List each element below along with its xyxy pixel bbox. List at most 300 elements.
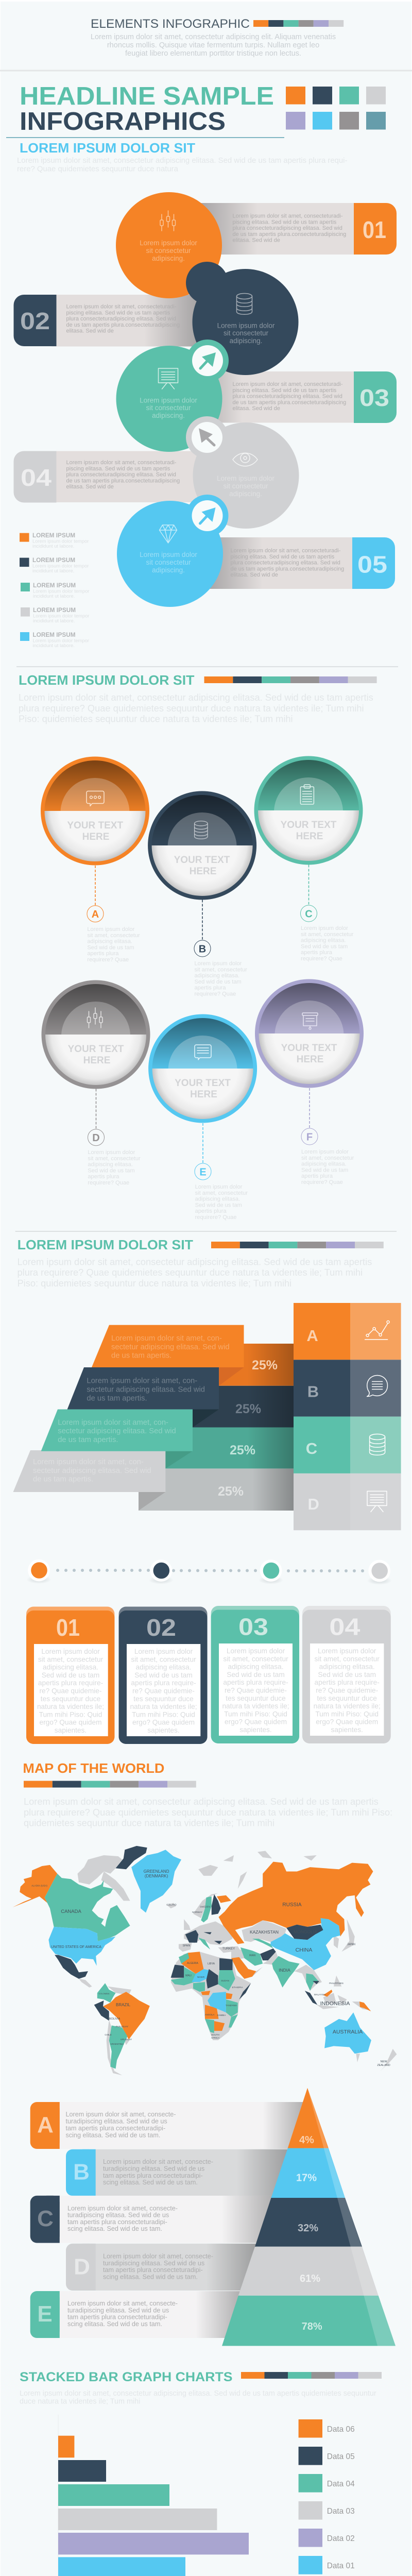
bar D: tam apertis plura consecteturadipi- [103, 2266, 203, 2274]
bar chart legend: Data 04 [327, 2480, 355, 2488]
headline [20, 82, 274, 135]
bubble B navy: HERE [190, 866, 216, 877]
circle: step 03 teal: sit consectetur [146, 404, 191, 412]
bubble D grey: requirere? Quae [88, 1180, 129, 1186]
card 02: re? Quae quidemie- [132, 1687, 195, 1695]
card 02 [119, 1606, 207, 1744]
ribbon: grey: Lorem ipsum dolor sit amet, con- [33, 1458, 144, 1466]
bubble C teal: Lorem ipsum dolor [301, 925, 348, 931]
bar E: Lorem ipsum dolor sit amet, consecte- [67, 2300, 178, 2307]
map: country labels: COLOMBIA [98, 1992, 110, 1995]
blue countries [48, 1850, 371, 2054]
section 3 header: Piso: quidemietes sequuntur duce natura ta videntes ile; Tum mihi [18, 1278, 291, 1289]
map: country labels: BRAZIL [116, 2003, 131, 2007]
panel: step 04 bar: Lorem ipsum dolor sit amet, consecteturadi- [66, 460, 177, 466]
circle: step 04 grey: adipiscing. [229, 490, 262, 498]
card 02: sapientes. [147, 1726, 180, 1734]
panel: step 05 bar: de us tam apertis plura.consecteturadipiscing [231, 566, 344, 572]
circle: step 03 teal: Lorem ipsum dolor [140, 397, 197, 404]
card 04: re? Quae quidemie- [316, 1687, 378, 1694]
card 01: 01 [56, 1614, 80, 1641]
map: country labels: SPAIN [183, 1944, 191, 1947]
card 01: adipiscing elitasa. [43, 1664, 98, 1671]
bubble F purple: sit amet, consectetur [301, 1155, 354, 1161]
map: country labels [31, 1869, 390, 2067]
navy countries [55, 1846, 323, 2021]
map: country labels: JAPAN [347, 1943, 355, 1946]
bubble B navy: apertis plura [195, 985, 226, 991]
bubble E blue: sit amet, consectetur [195, 1190, 248, 1196]
bubble A orange: A [92, 909, 99, 920]
ribbon: navy: Lorem ipsum dolor sit amet, con- [87, 1377, 197, 1385]
map: country labels: ALASKA (USA) [31, 1885, 47, 1887]
bubble F purple: F [306, 1131, 313, 1143]
circle: step 03 teal: adipiscing. [152, 412, 185, 419]
bubble E blue: YOUR TEXT [175, 1078, 231, 1089]
timeline node 3 [260, 1560, 282, 1582]
circle: step 02 navy [186, 262, 299, 375]
pyramid chart: 4% [299, 2134, 314, 2146]
pyramid chart: 78% [302, 2321, 322, 2332]
legend: step colours: incididunt ut labore. [33, 618, 75, 623]
card 03: natura ta videntes ile; [222, 1702, 289, 1710]
bubble B navy: sit amet, consectetur [195, 967, 247, 973]
bar chart legend: Data 06 [327, 2425, 355, 2434]
bar E: tam apertis plura consecteturadipi- [67, 2313, 167, 2320]
card 04: Tum mihi Piso: Quid [315, 1710, 379, 1718]
map: country labels: ANGOLA [205, 2013, 214, 2016]
bar chart legend: Data 03 [327, 2507, 355, 2516]
map header: plura requirere? Quae quidemietes sequuntur duce natura ta videntes ile; Tum mihi Piso: [24, 1807, 392, 1818]
bubble A orange: Sed wid de us tam [87, 944, 134, 951]
bar D: D [74, 2255, 90, 2279]
panel: step 03 bar: de us tam apertis plura.consecteturadipiscing [233, 399, 346, 405]
bar chart legend: Data 05 [327, 2452, 355, 2461]
card 02: 02 [146, 1614, 176, 1641]
header colour strip [253, 20, 344, 27]
bar B: scing elitasa. Sed wid de us tam. [103, 2179, 198, 2186]
bar A: Lorem ipsum dolor sit amet, consecte- [66, 2111, 176, 2118]
map: country labels: SUDAN [221, 1979, 229, 1982]
card 04: 04 [329, 1614, 360, 1640]
bubble F purple: adipiscing elitasa. [301, 1161, 347, 1167]
panel: step 01 bar: plura consecteturadipiscing elitasa. Sed wid [233, 225, 342, 231]
map: country labels: CHILE [105, 2033, 112, 2036]
bar E: turadipiscing elitasa. Sed wid de us [67, 2307, 169, 2314]
card 04: Lorem ipsum dolor [318, 1647, 376, 1655]
bubble E blue: Sed wid de us tam [195, 1202, 242, 1208]
bubble E blue: adipiscing elitasa. [195, 1196, 240, 1202]
step tile A: A [306, 1327, 318, 1345]
bubble D grey: HERE [83, 1055, 110, 1066]
icon: speech bubble lines [195, 1045, 211, 1060]
bubble C teal: Sed wid de us tam [301, 943, 348, 950]
bubble E blue [148, 1014, 257, 1221]
card 03: apertis plura require- [223, 1679, 288, 1686]
circle: step 05 blue [117, 495, 229, 607]
bubble B navy: Sed wid de us tam [195, 979, 242, 985]
section 2 header: LOREM IPSUM DOLOR SIT [19, 672, 195, 688]
card 02: Sed wid de us tam [134, 1671, 193, 1679]
bubble B navy: requirere? Quae [195, 991, 236, 997]
ribbon: orange [92, 1325, 294, 1386]
icon: database small [195, 821, 208, 839]
panel: step 04 bar: 04 [21, 464, 52, 491]
bubble E blue: requirere? Quae [195, 1214, 236, 1221]
header block [0, 17, 412, 71]
circle: step 01 orange: Lorem ipsum dolor [140, 239, 197, 247]
card 01: natura ta videntes ile; [37, 1703, 104, 1710]
icon: hanging screen [302, 1013, 318, 1029]
card 01: Sed wid de us tam [42, 1671, 99, 1679]
circle: step 05 blue: adipiscing. [152, 566, 185, 574]
map: country labels: (DENMARK) [145, 1874, 168, 1878]
icon: presentation board [159, 368, 178, 389]
card 04: tes sequuntur duce [317, 1694, 377, 1702]
ribbon: navy: sectetur adipiscing elitasa. Sed wid [87, 1385, 205, 1394]
pyramid chart: 17% [296, 2173, 317, 2184]
card 01 [26, 1606, 114, 1744]
icon: white arrow badge teal [192, 345, 223, 376]
ribbon: grey [13, 1450, 294, 1511]
map: country labels: ZEALAND [377, 2064, 390, 2067]
card 04: adipiscing elitasa. [319, 1663, 375, 1671]
section 2 header: Lorem ipsum dolor sit amet, consectetur adipiscing elitasa. Sed wid de us tam apertis [19, 692, 373, 703]
circle: step 04 grey [186, 416, 299, 529]
step tile D [294, 1473, 401, 1530]
bar chart legend: Data 01 [327, 2562, 355, 2570]
panel: step 03 bar: plura consecteturadipiscing elitasa. Sed wid [233, 394, 342, 400]
ribbon: orange: sectetur adipiscing elitasa. Sed wid [111, 1343, 230, 1351]
legend: step colours: Lorem ipsum dolor tempor [32, 538, 89, 544]
card 04: sapientes. [331, 1726, 363, 1734]
ribbon: navy: de us tam apertis. [87, 1395, 147, 1403]
world map [12, 1846, 397, 2075]
panel: step 02 bar: Lorem ipsum dolor sit amet, consecteturadi- [66, 304, 177, 310]
card 02: sit amet, consectetur [131, 1655, 196, 1663]
step tile B [294, 1360, 401, 1417]
timeline node 1 [28, 1560, 50, 1581]
map: country labels: INDIA [279, 1968, 290, 1973]
panel: step 04 bar [13, 451, 201, 503]
map: country labels: TANZANIA [226, 2004, 237, 2007]
map: country labels: URUGUAY [121, 2038, 132, 2041]
icon: presentation board white [367, 1491, 387, 1512]
bubble C teal: requirere? Quae [301, 956, 342, 962]
panel: step 02 bar: 02 [20, 308, 50, 334]
icon: speech bubble dots [87, 791, 104, 806]
orange countries [12, 1862, 373, 2040]
headline: INFOGRAPHICS [20, 108, 226, 135]
bubble E blue: Lorem ipsum dolor [195, 1184, 243, 1190]
panel: step 05 bar: 05 [357, 551, 387, 578]
panel: step 02 bar: de us tam apertis plura.consecteturadipiscing [66, 322, 180, 328]
bubble F purple: requirere? Quae [301, 1179, 343, 1185]
card 03: adipiscing elitasa. [228, 1663, 284, 1671]
bubble B navy: YOUR TEXT [174, 855, 230, 866]
circle: step 04 grey: sit consectetur [223, 482, 268, 490]
card 04: sit amet, consectetur [315, 1655, 380, 1663]
card 03: Sed wid de us tam [227, 1671, 285, 1679]
panel: step 04 bar: de us tam apertis plura.consecteturadipiscing [66, 478, 180, 484]
map: country labels: ARGENTINA [110, 2043, 124, 2045]
legend: step colours: Lorem ipsum dolor tempor [33, 638, 89, 643]
map: country labels: CHINA [296, 1947, 312, 1953]
bubble C teal: sit amet, consectetur [301, 931, 354, 938]
bubble A orange: adipiscing elitasa. [87, 939, 132, 945]
map: country labels: RUSSIA [282, 1902, 302, 1908]
map: country labels: TURKEY [222, 1947, 235, 1951]
bubble B navy: Lorem ipsum dolor [195, 960, 242, 967]
card 02: Lorem ipsum dolor [134, 1648, 193, 1655]
bar D: turadipiscing elitasa. Sed wid de us [103, 2260, 204, 2267]
bubble A orange [41, 756, 149, 963]
map: country labels: MONGOLIA [294, 1929, 317, 1934]
legend: step colours: LOREM IPSUM [33, 582, 76, 589]
card 01: apertis plura require- [38, 1679, 103, 1687]
bubble D grey [41, 980, 150, 1186]
panel: step 03 bar: Lorem ipsum dolor sit amet, consecteturadi- [233, 381, 343, 387]
bubble F purple [255, 979, 364, 1185]
bar E [30, 2291, 240, 2338]
panel: step 01 bar: piscing elitasa. Sed wid de us tam apertis [233, 219, 337, 225]
ribbon: teal: Lorem ipsum dolor sit amet, con- [58, 1418, 168, 1427]
arctic and base grey [78, 1846, 397, 2075]
ribbon: orange: de us tam apertis. [111, 1352, 171, 1360]
panel: step 05 bar: Lorem ipsum dolor sit amet, consecteturadi- [231, 548, 341, 554]
circle: step 02 navy: adipiscing. [230, 337, 262, 345]
bubble E blue: apertis plura [195, 1208, 227, 1214]
section 3 header: LOREM IPSUM DOLOR SIT [18, 1237, 193, 1252]
bubble F purple: Sed wid de us tam [301, 1167, 348, 1173]
bar B: tam apertis plura consecteturadipi- [103, 2172, 203, 2179]
icon: speech bubble round [367, 1376, 387, 1396]
step tile D: D [308, 1495, 319, 1513]
panel: step 02 bar: plura consecteturadipiscing elitasa. Sed wid [66, 316, 176, 322]
map: country labels: ZAMBIA [217, 2014, 226, 2016]
map: country labels: BOLIVIA [109, 2018, 121, 2021]
icon: diamond [160, 525, 177, 543]
icon: database large [370, 1434, 385, 1455]
card 04: ergo? Quae quidem [316, 1718, 378, 1726]
bubble E blue: E [199, 1166, 207, 1178]
bubble D grey: Sed wid de us tam [88, 1167, 135, 1174]
pyramid chart [222, 2088, 396, 2346]
ribbon: teal: 25% [230, 1443, 255, 1458]
map: country labels: MALI [185, 1974, 192, 1977]
pyramid bars [30, 2102, 304, 2338]
bubble B navy: adipiscing elitasa. [195, 973, 239, 979]
map: country labels: MALAYSIA [314, 1993, 325, 1996]
step tile C: C [306, 1439, 317, 1458]
map: country labels: GREENLAND [144, 1869, 169, 1874]
bubble A orange: apertis plura [87, 951, 119, 957]
panel: step 02 bar: piscing elitasa. Sed wid de us tam apertis [66, 310, 170, 316]
card 02: natura ta videntes ile; [130, 1703, 197, 1710]
card 03: ergo? Quae quidem [225, 1718, 287, 1726]
bubble A orange: Lorem ipsum dolor [87, 926, 135, 933]
card 04: Sed wid de us tam [318, 1671, 376, 1679]
stacked bar section header: STACKED BAR GRAPH CHARTS [20, 2370, 233, 2384]
section 1 description: Lorem ipsum dolor sit amet, consectetur adipiscing elitasa. Sed wid de us tam apertis plura requi- [17, 157, 347, 165]
bar C [30, 2196, 273, 2243]
card 02: adipiscing elitasa. [135, 1664, 192, 1671]
bar B [66, 2149, 288, 2196]
bubble D grey: apertis plura [88, 1174, 119, 1180]
step tile A [294, 1303, 401, 1360]
card 03: Lorem ipsum dolor [227, 1647, 285, 1655]
icon: database [237, 294, 252, 314]
bar B: turadipiscing elitasa. Sed wid de us [103, 2165, 204, 2173]
bubble C teal [254, 756, 363, 962]
pyramid chart: 61% [300, 2273, 320, 2284]
legend: step colours [20, 532, 89, 648]
ribbon: teal: de us tam apertis. [58, 1436, 118, 1444]
bar A: scing elitasa. Sed wid de us tam. [66, 2132, 160, 2139]
bar D: scing elitasa. Sed wid de us tam. [103, 2273, 198, 2280]
section 3 header: Lorem ipsum dolor sit amet, consectetur adipiscing elitasa. Sed wid de us tam apertis [18, 1257, 372, 1267]
bubble C teal: C [305, 908, 313, 920]
panel: step 04 bar: elitasa. Sed wid de [66, 484, 114, 490]
panel: step 01 bar: 01 [363, 216, 386, 243]
icon: clipboard [300, 785, 314, 804]
bubble C teal: HERE [296, 831, 323, 842]
bubble E blue: HERE [190, 1089, 217, 1100]
bar chart legend: Data 02 [327, 2534, 355, 2543]
map: country labels: ETHIOPIA [232, 1986, 243, 1989]
icon: candlestick chart [160, 211, 175, 231]
ribbon: grey: 25% [218, 1484, 244, 1499]
stacked bar section header: duce natura ta videntes ile; Tum mihi [20, 2398, 140, 2406]
card 01: tes sequuntur duce [41, 1695, 100, 1703]
legend: step colours: LOREM IPSUM [32, 556, 75, 564]
bubble A orange: YOUR TEXT [67, 820, 123, 831]
bubble D grey: adipiscing elitasa. [88, 1162, 133, 1168]
panel: step 01 bar: elitasa. Sed wid de [233, 238, 280, 244]
card 03: sit amet, consectetur [223, 1655, 288, 1663]
circle: step 05 blue: Lorem ipsum dolor [140, 551, 197, 558]
map: country shapes [12, 1846, 397, 2075]
bubble C teal: apertis plura [301, 950, 333, 956]
card 01: sit amet, consectetur [38, 1655, 104, 1663]
map: country labels: PARAGUAY [116, 2025, 128, 2028]
ribbon stair chart [13, 1303, 401, 1530]
section 3 header: plura requirere? Quae quidemietes sequuntur duce natura ta videntes ile; Tum mihi [18, 1267, 363, 1278]
card 01: ergo? Quae quidem [39, 1719, 102, 1726]
header description: Lorem ipsum dolor sit amet, consectetur adipiscing elit. Aliquam venenatis [91, 33, 336, 41]
legend: step colours: incididunt ut labore. [33, 593, 75, 599]
bar E: E [37, 2301, 53, 2327]
stacked bar section header [20, 2370, 382, 2406]
card 02: ergo? Quae quidem [132, 1719, 195, 1726]
legend: step colours: LOREM IPSUM [33, 631, 75, 638]
card 01: Tum mihi Piso: Quid [39, 1710, 102, 1718]
bubble C teal: YOUR TEXT [281, 820, 337, 831]
map: country labels: NIGER [197, 1976, 205, 1978]
bar A: tam apertis plura consecteturadipi- [66, 2125, 165, 2132]
headline rule [6, 137, 284, 138]
card 04 [302, 1606, 391, 1743]
panel: step 04 bar: plura consecteturadipiscing elitasa. Sed wid [66, 472, 176, 478]
icon: white arrow badge blue [192, 500, 222, 531]
bar C: C [37, 2206, 54, 2231]
section 2 header: plura requirere? Quae quidemietes sequuntur duce natura ta videntes ile; Tum mihi [19, 703, 364, 714]
bubble D grey: sit amet, consectetur [88, 1156, 141, 1162]
legend: step colours: Lorem ipsum dolor tempor [33, 613, 89, 618]
card 02: tes sequuntur duce [133, 1695, 194, 1703]
card 03 [211, 1606, 299, 1743]
section 2 header: Piso: quidemietes sequuntur duce natura ta videntes ile; Tum mihi [19, 714, 293, 724]
circle: step 05 blue: sit consectetur [146, 558, 191, 566]
card 03: re? Quae quidemie- [225, 1687, 287, 1694]
map header: MAP OF THE WORLD [23, 1761, 164, 1776]
bubble F purple: YOUR TEXT [281, 1043, 337, 1054]
map: country labels: AUSTRALIA [333, 2029, 363, 2035]
dotted timeline [27, 1560, 392, 1585]
legend: step colours: LOREM IPSUM [32, 532, 75, 539]
circle: step 02 navy: sit consectetur [224, 329, 269, 337]
header divider [0, 70, 412, 71]
panel: step 03 bar: piscing elitasa. Sed wid de us tam apertis [233, 387, 337, 394]
ribbon: navy: 25% [235, 1402, 261, 1416]
stacked bar section header: Lorem ipsum dolor sit amet, consectetur adipiscing elitasa. Sed wid de us tam apertis quidemietes sequuntur [20, 2389, 376, 2398]
ribbon: grey: de us tam apertis. [33, 1476, 93, 1484]
section 3 header [15, 1231, 397, 1289]
map: country labels: NEW [381, 2060, 387, 2063]
panel: step 03 bar: 03 [359, 384, 389, 411]
card 01: Lorem ipsum dolor [41, 1648, 100, 1655]
panel: step 05 bar [203, 537, 395, 589]
card 03: 03 [238, 1614, 268, 1640]
header title: ELEMENTS INFOGRAPHIC [91, 17, 250, 31]
circle: step 01 orange [116, 192, 222, 298]
circle: step 02 navy: Lorem ipsum dolor [217, 321, 275, 329]
legend: step colours: Lorem ipsum dolor tempor [32, 563, 89, 569]
teal countries [45, 1874, 319, 2069]
bar A: A [37, 2112, 54, 2138]
bar C: tam apertis plura consecteturadipi- [67, 2218, 167, 2226]
panel: step 04 bar: piscing elitasa. Sed wid de us tam apertis [66, 466, 170, 472]
card 03: sapientes. [239, 1726, 272, 1734]
header description: rhoncus mollis. Quisque vitae fermentum turpis. Nullam eget leo [107, 41, 319, 49]
map: country labels: KAZAKHSTAN [250, 1929, 279, 1935]
map: country labels: CANADA [61, 1909, 81, 1914]
circle: step 04 grey: Lorem ipsum dolor [217, 474, 274, 482]
section 1 description: rere? Quae quidemietes sequuntur duce natura [17, 165, 179, 173]
panel: step 02 bar: elitasa. Sed wid de [66, 328, 114, 334]
bar E: scing elitasa. Sed wid de us tam. [67, 2320, 162, 2328]
card 03: tes sequuntur duce [226, 1694, 286, 1702]
bubble F purple: Lorem ipsum dolor [301, 1149, 349, 1155]
card 04: apertis plura require- [315, 1679, 380, 1686]
bubble D grey: YOUR TEXT [68, 1044, 124, 1055]
ribbon: orange: 25% [252, 1358, 278, 1372]
legend: step colours: LOREM IPSUM [33, 606, 76, 614]
icon: line chart [365, 1321, 389, 1340]
ribbon: grey: sectetur adipiscing elitasa. Sed wid [33, 1467, 151, 1475]
palette swatches [286, 87, 386, 130]
legend: step colours: incididunt ut labore. [33, 642, 75, 648]
card 02: apertis plura require- [131, 1679, 196, 1687]
bar B: B [73, 2160, 90, 2185]
map: country labels: AFRICA [211, 2037, 219, 2039]
ribbon: teal [41, 1410, 294, 1468]
headline: HEADLINE SAMPLE [20, 82, 274, 110]
bar D [66, 2244, 256, 2291]
bubble A orange: sit amet, consectetur [87, 933, 140, 939]
card 02: Tum mihi Piso: Quid [132, 1710, 195, 1718]
horizontal bar chart [56, 2415, 253, 2576]
